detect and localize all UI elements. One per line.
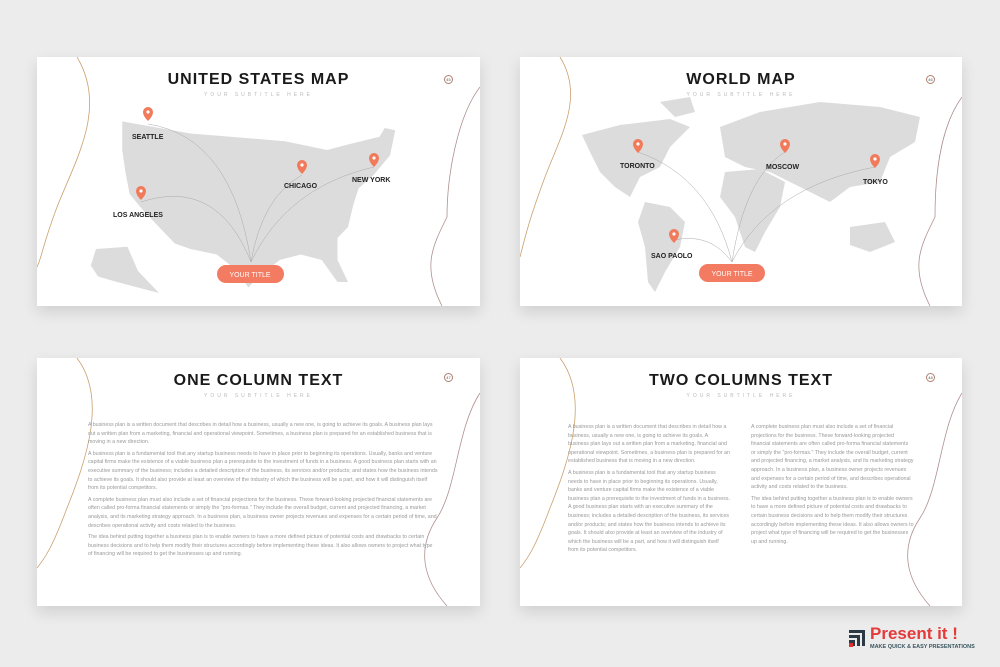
page number [444, 75, 453, 84]
panel: one column text [37, 358, 480, 606]
world map with pins: TOKYO [863, 179, 888, 186]
title: WORLD MAP [686, 71, 796, 88]
body text: A business plan is a fundamental tool that any startup business needs to have in place prior to beginning its operations. Usually, banks and venture capital firms make the existence of a viable business plan a prerequisite to the investment of funds in a business. A good business plan starts with an executive summary of the business; includes a detailed description of the business, its services and/or products; and states how the business intends to achieve its goals. It should also provide at least an overview of the industry of which the business will be a part, and how it will distinguish itself from its potential competitors. [88, 451, 438, 491]
body text: A business plan is a written document that describes in detail how a business, usually a new one, is going to achieve its goals. A business plan lays out a written plan from a marketing, financial and operational viewpoint. Sometimes, a business plan is prepared for an established business that is moving in a new direction. [88, 422, 432, 445]
title: ONE COLUMN TEXT [174, 372, 343, 389]
page number [926, 373, 935, 382]
panel: two columns text [520, 358, 962, 606]
us map with pins: NEW YORK [352, 177, 390, 184]
left column text: A business plan is a written document that describes in detail how a business, usually a new one, is going to achieve its goals. A business plan lays out a written plan from a marketing, financial and operational viewpoint. Sometimes, a business plan is prepared for an established business that is moving in a new direction. [568, 424, 730, 464]
logo: present it: MAKE QUICK & EASY PRESENTATIONS [870, 644, 975, 650]
us map with pins: LOS ANGELES [113, 212, 163, 219]
us map with pins: CHICAGO [284, 183, 318, 190]
us map with pins: YOUR TITLE [229, 272, 271, 279]
world map with pins: TORONTO [620, 163, 655, 170]
body text: The idea behind putting together a business plan is to enable owners to have a more defined picture of potential costs and drawbacks to certain business decisions and to help them modify their structures accordingly before implementing these ideas. It also allows owners to project what type of financing will be required to get the businesses up and running. [88, 534, 432, 557]
subtitle: YOUR SUBTITLE HERE [204, 393, 313, 399]
page number: 45 [446, 77, 451, 82]
subtitle: YOUR SUBTITLE HERE [204, 92, 313, 98]
left column text: A business plan is a fundamental tool that any startup business needs to have in place prior to beginning its operations. Usually, banks and venture capital firms make the existence of a viable business plan a prerequisite to the investment of funds in a business. A good business plan starts with an executive summary of the business; includes a detailed description of the business, its services and/or products; and states how the business intends to achieve its goals. It should also provide at least an overview of the industry of which the business will be a part, and how it will distinguish itself from its potential competitors. [568, 470, 730, 553]
left column text [568, 424, 730, 553]
icon: logo mark [849, 630, 865, 647]
button [217, 265, 284, 283]
panel: united states map [37, 57, 480, 306]
logo: present it [849, 624, 975, 650]
subtitle: YOUR SUBTITLE HERE [686, 92, 796, 98]
page number [444, 373, 453, 382]
title: TWO COLUMNS TEXT [649, 372, 833, 389]
right column text: The idea behind putting together a business plan is to enable owners to have a more defined picture of potential costs and drawbacks to certain business decisions and to help them modify their structures accordingly before implementing these ideas. It also allows owners to project what type of financing will be required to get the businesses up and running. [751, 496, 914, 545]
title: UNITED STATES MAP [168, 71, 349, 88]
page number [926, 75, 935, 84]
right column text: A complete business plan must also include a set of financial projections for the business. These forward-looking projected financial statements are often called pro-forma financial statements or simply the "pro-formas." They include the overall budget, current and projected financing, a market analysis, and its marketing strategy approach. In a business plan, a business owner projects revenues and expenses for a certain period of time, and describes operational activity and costs related to the business. [751, 424, 914, 490]
page number: 47 [446, 375, 451, 380]
world map with pins: SAO PAOLO [651, 253, 693, 260]
right column text [751, 424, 914, 545]
panel: world map [520, 57, 962, 306]
logo: present it: Present it ! [870, 624, 958, 643]
us map with pins [90, 107, 396, 293]
page number: 46 [928, 77, 933, 82]
subtitle: YOUR SUBTITLE HERE [686, 393, 796, 399]
us map with pins: SEATTLE [132, 134, 164, 141]
body text [88, 422, 438, 557]
world map with pins: MOSCOW [766, 164, 799, 171]
page number: 48 [928, 375, 933, 380]
body text: A complete business plan must also include a set of financial projections for the business. These forward-looking projected financial statements are often called pro-forma financial statements or simply the "pro-formas." They include the overall budget, current and projected financing, a market analysis, and its marketing strategy approach. In a business plan, a business owner projects revenues and expenses for a certain period of time, and describes operational activity and costs related to the business. [88, 497, 437, 529]
pins [136, 107, 379, 200]
world map with pins [582, 97, 920, 292]
world map with pins: YOUR TITLE [711, 271, 753, 278]
